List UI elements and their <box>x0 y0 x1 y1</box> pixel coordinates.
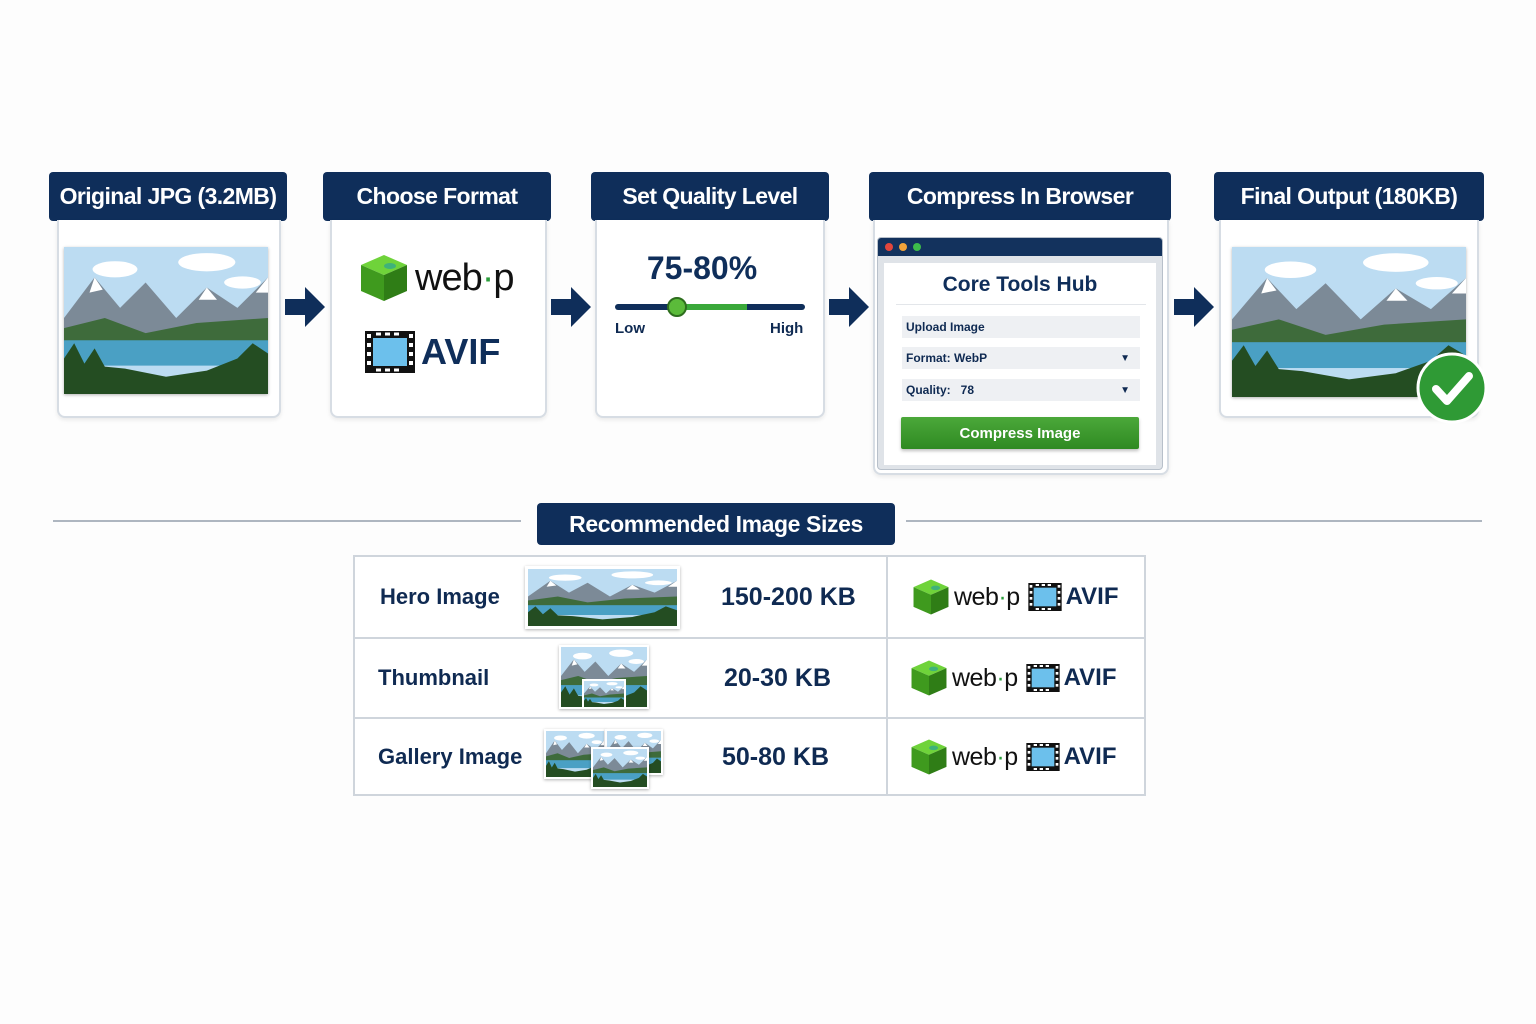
row: thumbnail: 20-30 KB <box>724 664 831 692</box>
field: quality: ▼ <box>1120 384 1130 396</box>
row: hero: AVIF <box>1066 583 1118 610</box>
field: upload: Upload Image <box>906 320 985 334</box>
field: format: ▼ <box>1120 352 1130 364</box>
row: thumbnail: AVIF <box>1064 664 1116 691</box>
button: compress image: Compress Image <box>960 424 1080 442</box>
row: thumbnail: web·p <box>952 664 1018 692</box>
text: 75-80%: 75-80% <box>647 250 757 286</box>
heading: original: Original JPG (3.2MB) <box>60 183 276 209</box>
step 1 panel: original JPG <box>49 172 287 420</box>
arrow 2 <box>551 287 591 327</box>
heading: final output <box>1214 172 1484 221</box>
arrow 4 <box>1174 287 1214 327</box>
text: core tools hub: Core Tools Hub <box>943 273 1097 296</box>
row: thumbnail <box>378 644 1116 712</box>
field: upload <box>902 316 1140 338</box>
row: gallery: Gallery Image <box>378 744 522 769</box>
row: gallery <box>378 728 1116 792</box>
field: format <box>902 347 1140 369</box>
row: hero: web·p <box>954 582 1020 610</box>
heading: compress <box>869 172 1171 221</box>
heading: choose format: Choose Format <box>357 183 517 209</box>
heading: recommended sizes <box>537 503 895 545</box>
row: thumbnail: Thumbnail <box>378 665 489 690</box>
icon: avif: AVIF <box>421 331 500 372</box>
browser window mockup <box>877 237 1163 470</box>
arrow 1 <box>285 287 325 327</box>
image: original landscape <box>64 247 268 394</box>
row: gallery: web·p <box>952 742 1018 770</box>
row: gallery: 50-80 KB <box>722 742 829 770</box>
step 4 panel: compress in browser <box>869 172 1171 478</box>
step 3 panel: quality: High <box>770 320 803 337</box>
slider <box>615 297 805 317</box>
labels low/high: Low <box>615 320 645 337</box>
row: hero: 150-200 KB <box>721 582 856 610</box>
image: compressed landscape <box>1232 247 1466 397</box>
heading: choose format <box>323 172 551 221</box>
field: format: Format: WebP <box>906 351 987 365</box>
icon: webp: web·p <box>415 256 514 298</box>
heading: recommended sizes: Recommended Image Sizes <box>569 510 863 536</box>
heading: final output: Final Output (180KB) <box>1241 183 1457 209</box>
button: compress image <box>901 417 1139 449</box>
row: hero <box>380 565 1118 632</box>
heading: quality: Set Quality Level <box>622 183 798 209</box>
icon: check <box>1416 352 1484 421</box>
heading: quality <box>591 172 829 221</box>
heading: original <box>49 172 287 221</box>
row: hero: Hero Image <box>380 584 500 609</box>
row: gallery: AVIF <box>1064 743 1116 770</box>
field: quality <box>902 379 1140 401</box>
arrow 3 <box>829 287 869 327</box>
field: quality: Quality: 78 <box>906 383 974 397</box>
table: recommended sizes <box>353 555 1146 796</box>
icon: webp <box>361 255 514 301</box>
step 5 panel: final output <box>1214 172 1484 420</box>
icon: avif <box>365 331 500 373</box>
heading: compress: Compress In Browser <box>907 183 1133 209</box>
step 3 panel: quality <box>591 172 829 420</box>
step 2 panel: choose format <box>323 172 551 420</box>
